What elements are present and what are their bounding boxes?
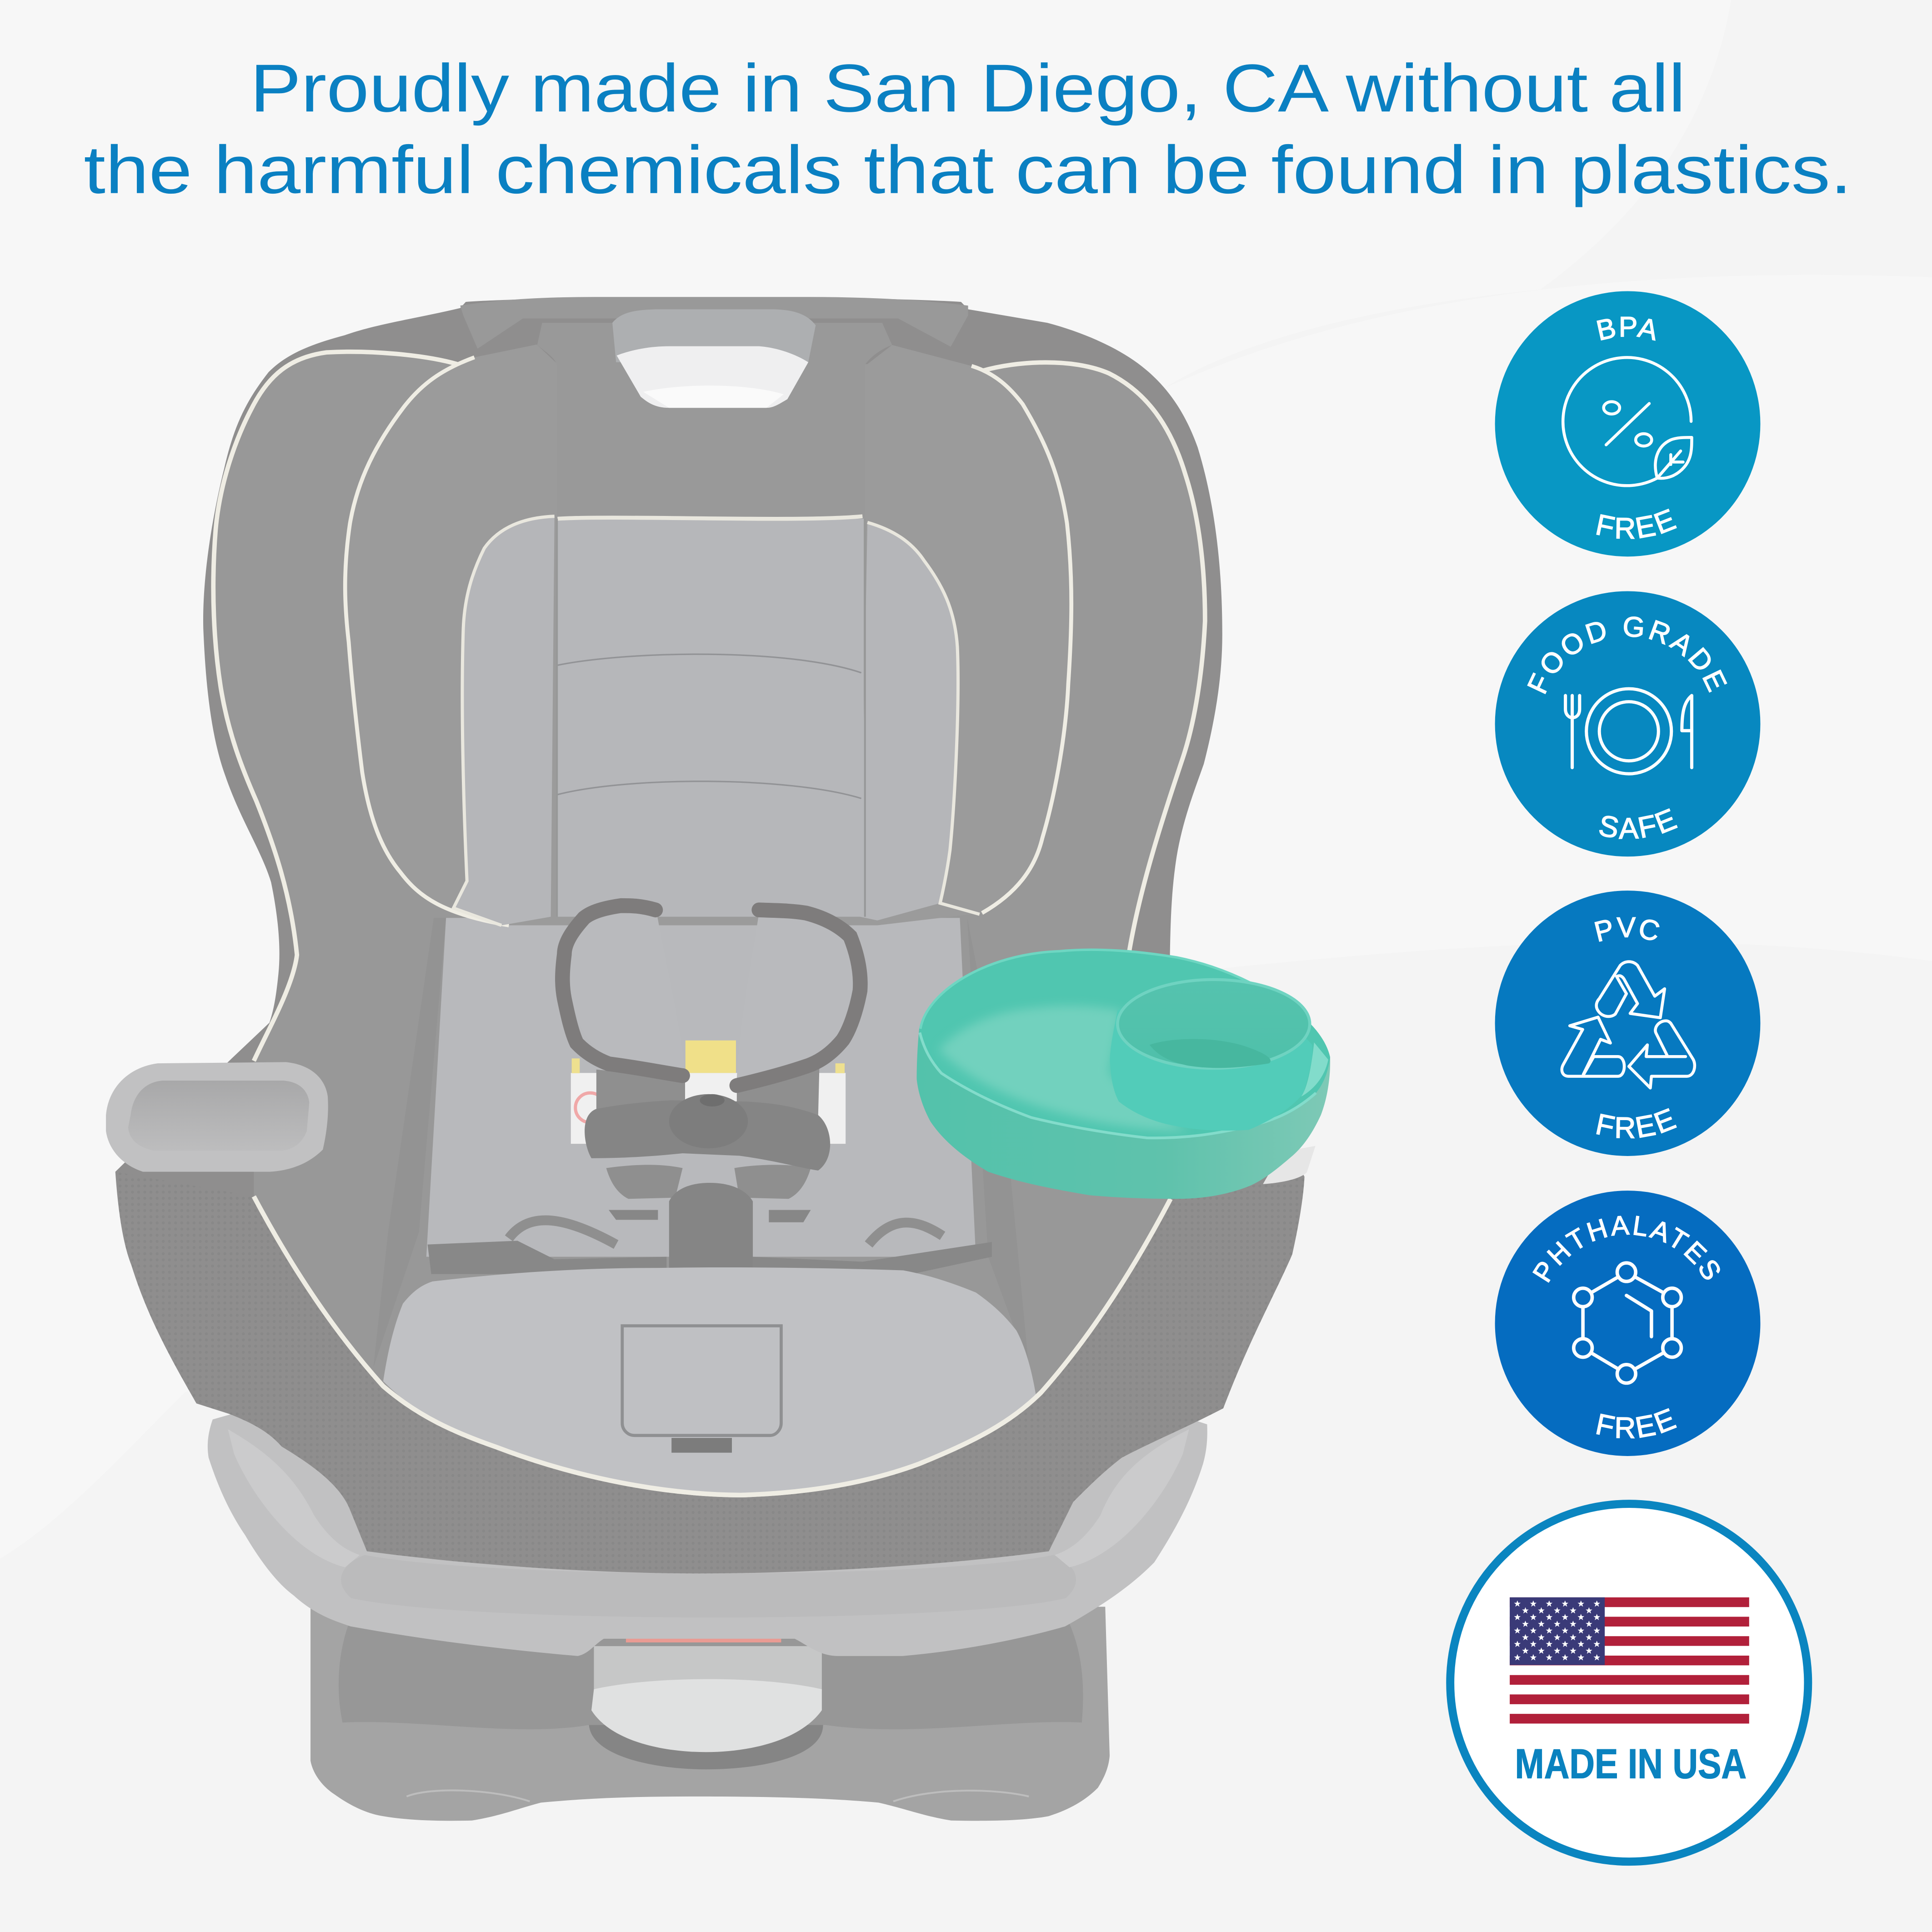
harness loops xyxy=(562,906,860,1086)
lumbar cushion xyxy=(453,516,980,926)
car seat xyxy=(106,297,1305,1821)
label: FREE: FREE xyxy=(1590,1400,1683,1448)
recline pedal xyxy=(589,1632,823,1769)
lap belts xyxy=(428,1220,992,1274)
label: BPA: BPA xyxy=(1593,311,1662,347)
base front bar xyxy=(341,1555,1076,1617)
icon: American flag xyxy=(1510,1597,1749,1724)
label: FOOD GRADE: FOOD GRADE xyxy=(1522,611,1734,699)
crotch strap xyxy=(669,1183,753,1279)
label: FREE: FREE xyxy=(1590,501,1683,549)
headrest centre neck xyxy=(537,323,892,517)
badge: food grade safe xyxy=(1495,591,1760,856)
top headrest strap xyxy=(460,297,968,349)
outer seat piping xyxy=(213,352,1205,1061)
icon: recycle arrows xyxy=(1562,962,1695,1088)
badge: made in USA xyxy=(1450,1504,1808,1862)
tray floor highlight xyxy=(939,1006,1189,1131)
icon: percent and leaf xyxy=(1563,357,1692,486)
title: Proudly made in San Diego, CA without all xyxy=(250,50,1686,126)
cup outer wall xyxy=(1110,986,1312,1131)
cup well floor xyxy=(1150,1039,1271,1068)
title xyxy=(84,50,1852,208)
crotch pad xyxy=(622,1326,781,1453)
tray outer body xyxy=(917,950,1330,1199)
tray rim highlight xyxy=(920,1032,1316,1138)
harness strap pads xyxy=(569,911,852,1078)
plastic base shell xyxy=(208,1392,1207,1656)
tray top rim highlight xyxy=(921,950,1269,1029)
base side highlights xyxy=(228,1429,1189,1567)
icon: molecule ring xyxy=(1574,1263,1681,1383)
tray bowl interior xyxy=(919,950,1330,1138)
warning label xyxy=(571,1041,846,1144)
redraw piping over cushion xyxy=(383,1386,1041,1495)
label: PVC: PVC xyxy=(1591,912,1664,948)
seat shell fabric xyxy=(115,297,1305,1573)
headrest wing pad xyxy=(345,345,1071,926)
label: PHTHALATES: PHTHALATES xyxy=(1527,1210,1729,1287)
label: SAFE: SAFE xyxy=(1593,801,1683,849)
product: teal tray xyxy=(917,950,1330,1199)
chest clip xyxy=(585,1094,830,1222)
badge: BPA free xyxy=(1495,291,1760,556)
seat base: lower foot xyxy=(310,1607,1110,1821)
headrest handle xyxy=(612,309,816,408)
seat interior xyxy=(213,352,1205,1495)
cup opening xyxy=(1117,980,1310,1068)
label: FREE: FREE xyxy=(1590,1100,1683,1148)
badge: PVC free xyxy=(1495,891,1760,1156)
lower back panel xyxy=(426,918,976,1257)
tray side slot xyxy=(1301,1042,1328,1096)
lower seat piping xyxy=(254,1196,1171,1495)
label: MADE IN USA: MADE IN USA xyxy=(1515,1741,1747,1787)
bucket side shading xyxy=(373,918,1029,1368)
badge: phthalates free xyxy=(1495,1191,1760,1456)
armrest cup holder xyxy=(106,1062,328,1172)
icon: plate and cutlery xyxy=(1566,689,1692,774)
title: the harmful chemicals that can be found in plastics. xyxy=(84,132,1852,208)
tray clip xyxy=(1263,1146,1316,1184)
wing pad piping xyxy=(345,357,1071,926)
seat cushion xyxy=(383,1267,1036,1495)
fabric mesh texture xyxy=(115,1172,1305,1573)
shoulder webbing xyxy=(596,1067,819,1116)
